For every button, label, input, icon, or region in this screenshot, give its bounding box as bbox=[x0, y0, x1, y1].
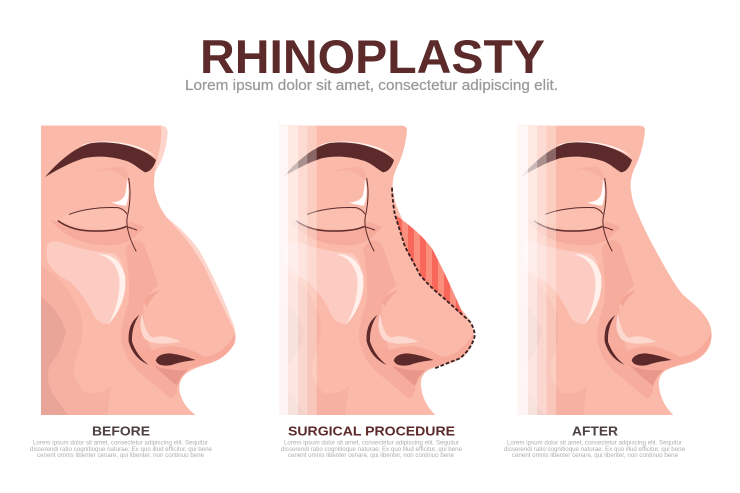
before description: Lorem ipsum dolor sit amet, consectetur adipiscing elit. Sequitur bbox=[33, 440, 208, 446]
surgical procedure heading: SURGICAL PROCEDURE bbox=[288, 424, 455, 438]
panel: surgical procedure bbox=[279, 126, 475, 415]
before heading: BEFORE bbox=[92, 424, 150, 438]
surgical procedure description: cenent omnis libenter cenare, qui libenter, non continuo bene bbox=[288, 453, 455, 459]
before facial features bbox=[41, 142, 235, 415]
surgical face skin bbox=[279, 126, 474, 415]
before face skin bbox=[41, 126, 235, 415]
dashed incision line bbox=[392, 188, 475, 369]
before description: cenent omnis libenter cenare, qui libenter, non continuo bene bbox=[37, 453, 205, 459]
after face skin bbox=[517, 126, 712, 415]
surgical procedure description: Lorem ipsum dolor sit amet, consectetur adipiscing elit. Sequitur bbox=[284, 440, 459, 446]
panel: after bbox=[517, 126, 712, 415]
after heading: AFTER bbox=[572, 424, 619, 438]
before face outline bbox=[41, 126, 235, 415]
subtitle: Lorem ipsum dolor sit amet, consectetur adipiscing elit. bbox=[185, 78, 558, 94]
surgical facial features bbox=[279, 126, 473, 415]
caption: surgical procedure bbox=[281, 424, 463, 459]
panel: before bbox=[41, 126, 235, 415]
after description: disserendi ratio cognitioque naturae; Ex quo illud efficitur, qui bene bbox=[504, 447, 686, 453]
surgical procedure description bbox=[281, 440, 463, 459]
caption: before bbox=[30, 424, 213, 459]
after description bbox=[504, 440, 686, 459]
after description: Lorem ipsum dolor sit amet, consectetur adipiscing elit. Sequitur bbox=[507, 440, 682, 446]
caption: after bbox=[504, 424, 686, 459]
before description bbox=[30, 440, 213, 459]
removed nasal hump in red stripes bbox=[395, 215, 464, 318]
before description: disserendi ratio cognitioque naturae; Ex quo illud efficitur, qui bene bbox=[30, 447, 213, 453]
surgical procedure description: disserendi ratio cognitioque naturae; Ex quo illud efficitur, qui bene bbox=[281, 447, 463, 453]
after description: cenent omnis libenter cenare, qui libenter, non continuo bene bbox=[512, 453, 679, 459]
after facial features bbox=[517, 126, 711, 415]
title: RHINOPLASTY bbox=[200, 30, 545, 83]
